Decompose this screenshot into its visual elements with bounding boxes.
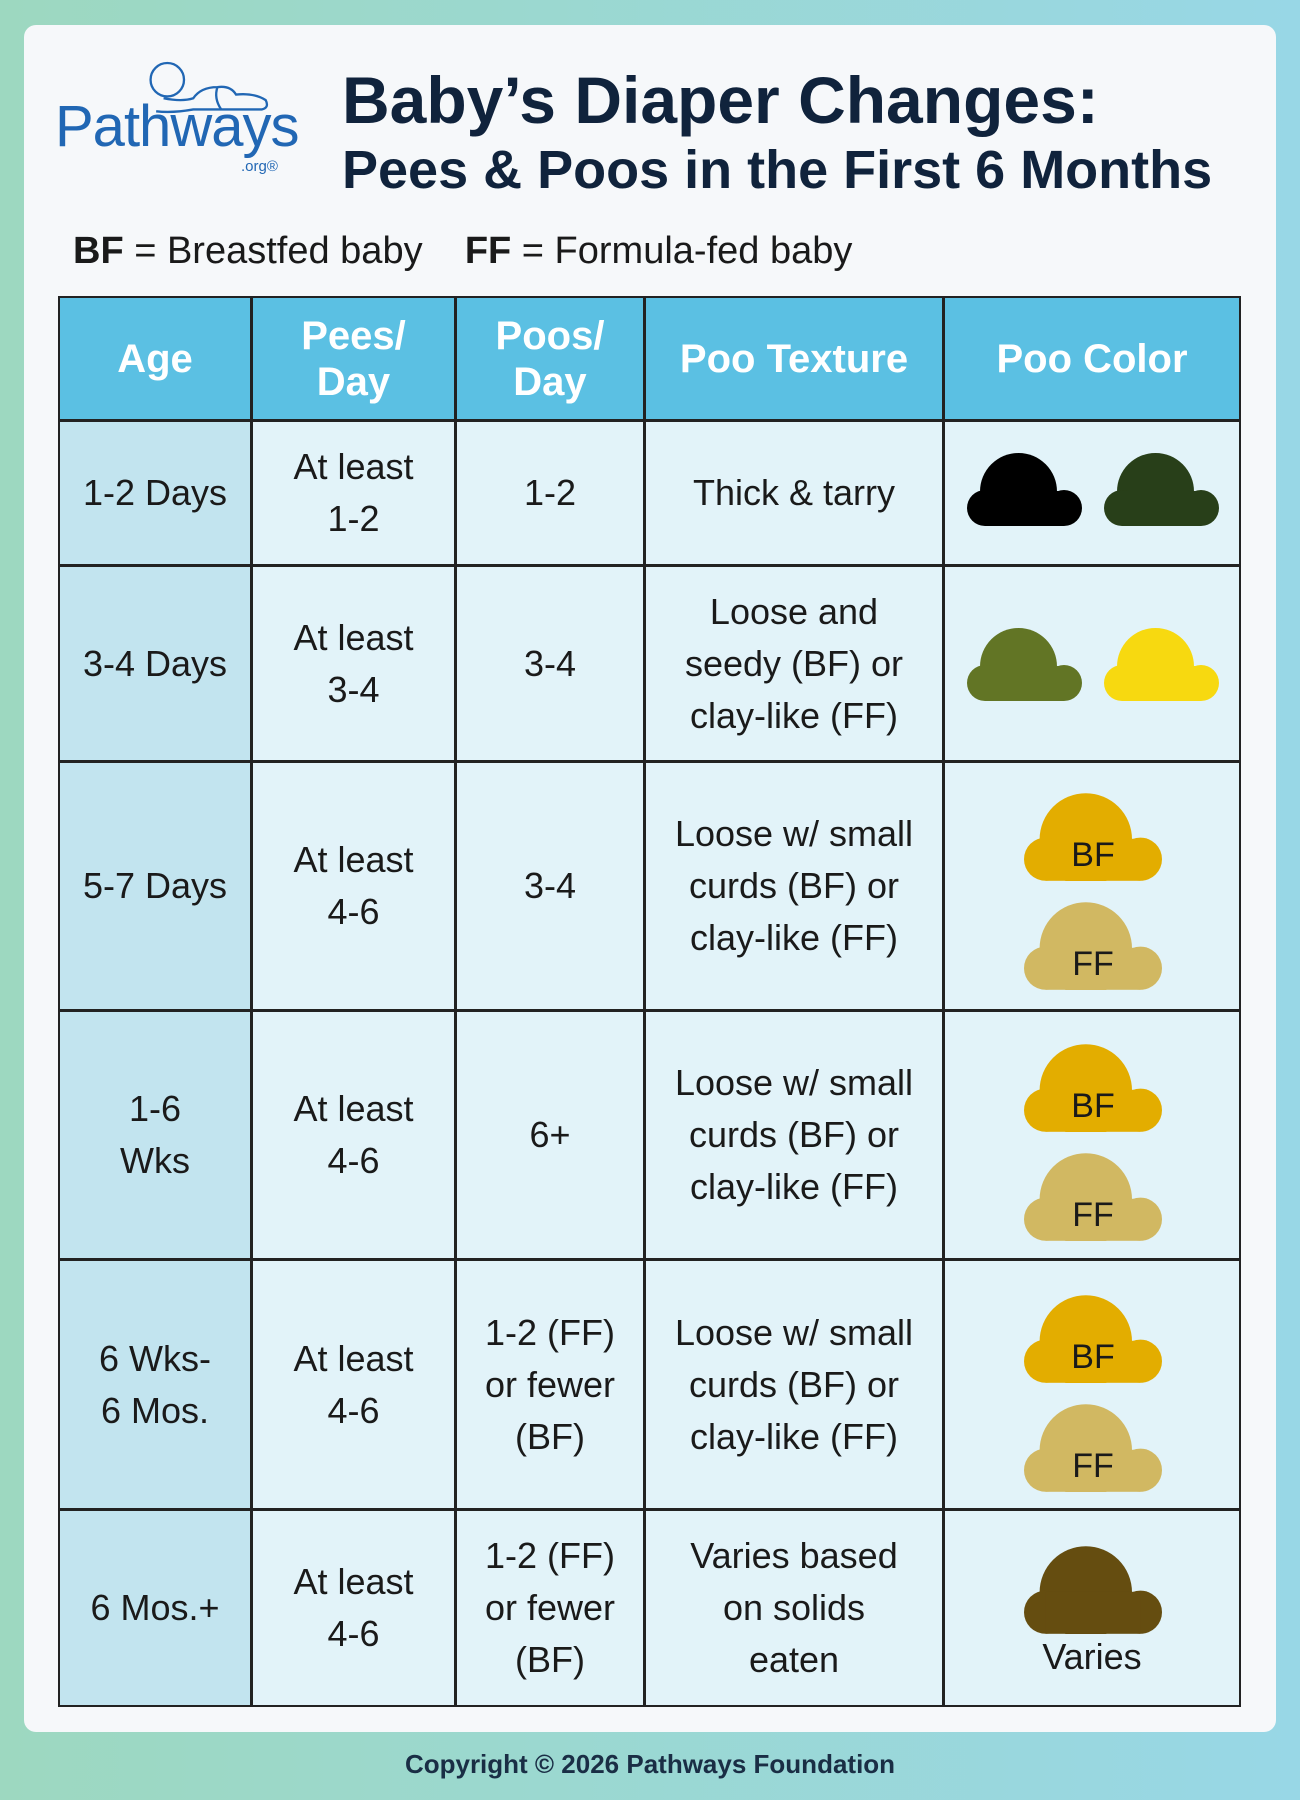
table: 4-6 <box>327 1390 380 1430</box>
table: Day <box>513 360 587 404</box>
table: Poos/ <box>496 314 604 358</box>
icon: FF cloud row4 <box>1024 1153 1162 1241</box>
table: seedy (BF) or <box>685 642 903 684</box>
table: or fewer <box>485 1364 615 1404</box>
table: Loose w/ small <box>675 1062 913 1103</box>
icon: FF cloud row3 <box>1024 902 1162 990</box>
table: At least <box>293 446 414 487</box>
table: At least <box>293 839 414 880</box>
row 1-2 days <box>58 421 1241 565</box>
icon: baby <box>149 62 268 114</box>
table: 4-6 <box>327 1613 380 1654</box>
table: 1-2 Days <box>83 472 227 513</box>
table: Loose w/ small <box>675 813 913 854</box>
row 6 wks-6 mos <box>58 1260 1241 1509</box>
table: 6+ <box>529 1114 571 1155</box>
icon: FF cloud row3: FF <box>1072 945 1114 983</box>
table: 6 Wks- <box>99 1338 211 1378</box>
table: 1-2 <box>327 498 380 539</box>
icon: dark green cloud <box>1104 453 1219 526</box>
icon: BF cloud row3 <box>1024 793 1162 881</box>
table: 4-6 <box>327 1140 380 1181</box>
table: or fewer <box>485 1587 615 1628</box>
icon: BF cloud row3: BF <box>1071 836 1115 874</box>
title: Pees & Poos in the First 6 Months <box>342 140 1212 200</box>
icon: FF cloud row5 <box>1024 1404 1162 1492</box>
icon: FF cloud row5: FF <box>1072 1447 1114 1485</box>
table: clay-like (FF) <box>690 1416 898 1456</box>
table: 3-4 <box>327 668 380 710</box>
varies label: Varies <box>1042 1636 1142 1677</box>
table: At least <box>293 1338 414 1378</box>
table: Day <box>317 360 390 404</box>
row 1-6 wks <box>58 1011 1241 1259</box>
table: 4-6 <box>327 891 380 932</box>
table: eaten <box>749 1639 839 1680</box>
legend: BF = Breastfed baby FF = Formula-fed baby <box>73 230 852 272</box>
icon: BF cloud row4: BF <box>1071 1087 1115 1125</box>
table: 3-4 <box>524 865 576 906</box>
table: 6 Mos. <box>101 1390 209 1430</box>
table: clay-like (FF) <box>690 694 898 736</box>
logo <box>55 62 298 175</box>
table: Pees/ <box>301 314 406 358</box>
header row <box>58 296 1241 420</box>
logo: .org® <box>241 158 278 175</box>
table: At least <box>293 1088 414 1129</box>
table: (BF) <box>515 1416 585 1456</box>
table: 5-7 Days <box>83 865 227 906</box>
table: 3-4 Days <box>83 642 227 684</box>
table: Poo Texture <box>680 336 908 380</box>
logo text: Pathways <box>55 94 298 159</box>
icon: BF cloud row4 <box>1024 1044 1162 1132</box>
title <box>342 63 1212 200</box>
table: curds (BF) or <box>689 1114 899 1155</box>
icon: yellow cloud <box>1104 628 1219 701</box>
icon: BF cloud row5 <box>1024 1295 1162 1383</box>
table: Poo Color <box>996 336 1188 380</box>
table: Loose w/ small <box>675 1312 913 1352</box>
table: Wks <box>120 1140 190 1181</box>
table: Age <box>117 336 193 380</box>
table: 1-2 (FF) <box>485 1535 615 1576</box>
title: Baby’s Diaper Changes: <box>342 63 1099 137</box>
row 5-7 days <box>58 762 1241 1010</box>
icon: varies cloud <box>1024 1546 1162 1634</box>
table: 1-6 <box>129 1088 181 1129</box>
table: on solids <box>723 1587 865 1628</box>
table: 6 Mos.+ <box>90 1587 220 1628</box>
table: clay-like (FF) <box>690 917 898 958</box>
table: At least <box>293 1561 414 1602</box>
row 3-4 days <box>58 566 1241 761</box>
table: Thick & tarry <box>693 472 895 513</box>
table: Varies based <box>690 1535 898 1576</box>
table: Loose and <box>710 590 878 632</box>
icon: BF cloud row5: BF <box>1071 1338 1115 1376</box>
row 6 mos+ <box>58 1510 1241 1707</box>
table: 1-2 (FF) <box>485 1312 615 1352</box>
table: 1-2 <box>524 472 576 513</box>
footer: Copyright © 2026 Pathways Foundation <box>405 1749 895 1779</box>
table: At least <box>293 616 414 658</box>
table: (BF) <box>515 1639 585 1680</box>
icon: FF cloud row4: FF <box>1072 1196 1114 1234</box>
table: clay-like (FF) <box>690 1166 898 1207</box>
table: curds (BF) or <box>689 865 899 906</box>
table: curds (BF) or <box>689 1364 899 1404</box>
icon: olive cloud <box>967 628 1082 701</box>
table: 3-4 <box>524 642 576 684</box>
icon: black cloud <box>967 453 1082 526</box>
